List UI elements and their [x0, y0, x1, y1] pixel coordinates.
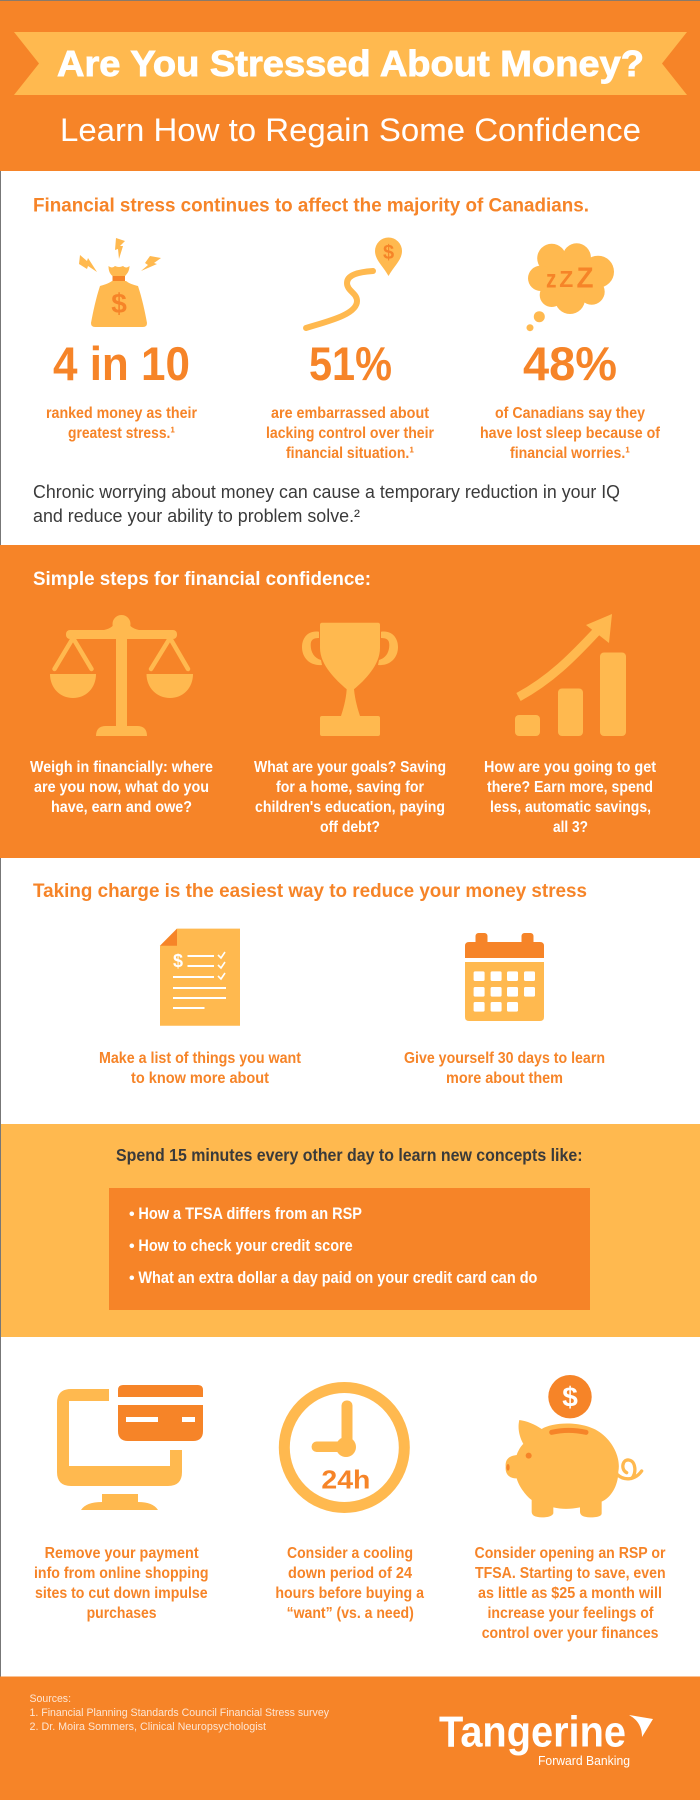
heading: simple steps: Simple steps for financial confidence: — [33, 569, 371, 590]
stat caption: lost sleep — [480, 405, 661, 462]
stat caption: ranked money: greatest stress.¹ — [68, 425, 175, 442]
stat caption: embarrassed: financial situation.¹ — [286, 445, 414, 462]
icon: winding road with location pin — [306, 238, 402, 328]
heading: taking charge: Taking charge is the easiest way to reduce your money stress — [33, 881, 587, 902]
concept list box: • — [129, 1206, 135, 1223]
subtitle: Learn How to Regain Some Confidence — [60, 112, 641, 148]
heading: spend 15 minutes: Spend 15 minutes every other day to learn new concepts like: — [116, 1145, 582, 1165]
step text: goals: for a home, saving for — [276, 779, 424, 796]
step text: weigh in: Weigh in financially: where — [30, 759, 213, 776]
step text: weigh in: are you now, what do you — [34, 779, 209, 796]
tip text: payment info — [34, 1545, 208, 1622]
tip text: cooling down — [275, 1545, 424, 1622]
stat caption: embarrassed: are embarrassed about — [271, 405, 430, 422]
step text: goals: What are your goals? Saving — [254, 759, 446, 776]
panel: simple steps — [0, 545, 700, 858]
icon: money bag with lightning bolts: $ — [111, 288, 127, 319]
caption: make a list — [99, 1050, 302, 1087]
stat: 48%: 48% — [523, 337, 617, 390]
icon: thought cloud with zzz: Z — [559, 266, 573, 292]
step text: how to get there: there? Earn more, spend — [487, 779, 653, 796]
text block: chronic worrying: Chronic worrying about money can cause a temporary reduction in your IQ — [33, 482, 620, 502]
icon: checklist document — [160, 929, 240, 1026]
text block: chronic worrying — [33, 482, 620, 526]
sources: 2. Dr. Moira Sommers, Clinical Neuropsychologist — [30, 1721, 266, 1733]
title ribbon banner — [14, 32, 687, 95]
concept list box: What an extra dollar a day paid on your credit card can do — [138, 1269, 537, 1287]
panel: footer — [0, 1676, 700, 1800]
icon: thought cloud with zzz: Z — [576, 263, 594, 295]
tip text: payment info: Remove your payment — [45, 1545, 199, 1562]
tip text: cooling down: hours before buying a — [275, 1585, 424, 1602]
concept list box: How to check your credit score — [138, 1237, 353, 1255]
caption: 30 days: more about them — [446, 1070, 563, 1087]
step text: goals: children's education, paying — [255, 799, 445, 816]
header panel — [0, 0, 700, 171]
tip text: cooling down: “want” (vs. a need) — [287, 1605, 414, 1622]
icon: 24 hour clock: 24h — [321, 1464, 370, 1494]
sources: 1. Financial Planning Standards Council Financial Stress survey — [30, 1707, 329, 1719]
step text: goals — [254, 759, 446, 836]
stat caption: ranked money — [46, 405, 197, 442]
text block: chronic worrying: and reduce your ability to problem solve.² — [33, 506, 360, 526]
concept list box: • — [129, 1270, 135, 1287]
panel: practical tips — [34, 1375, 666, 1642]
stat caption: ranked money: ranked money as their — [46, 405, 197, 422]
icon: winding road with location pin: $ — [383, 242, 394, 264]
step text: how to get there: How are you going to get — [484, 759, 657, 776]
stat caption: lost sleep: financial worries.¹ — [510, 445, 630, 462]
panel: taking charge — [33, 881, 605, 1087]
sources — [30, 1693, 329, 1733]
icon: piggy bank with coin — [506, 1375, 642, 1517]
tip text: open an RSP or TFSA: as little as $25 a month will — [478, 1585, 662, 1602]
caption: make a list: to know more about — [131, 1070, 270, 1087]
tip text: open an RSP or TFSA: Consider opening an RSP or — [474, 1545, 666, 1562]
stat caption: lost sleep: of Canadians say they — [495, 405, 645, 422]
stat: 4 in 10: 4 in 10 — [53, 337, 190, 390]
tip text: open an RSP or TFSA: increase your feelings of — [488, 1605, 654, 1622]
step text: goals: off debt? — [320, 819, 380, 836]
step text: weigh in: have, earn and owe? — [51, 799, 192, 816]
step text: how to get there: all 3? — [553, 819, 588, 836]
icon: trophy — [302, 623, 398, 736]
heading: financial stress: Financial stress continues to affect the majority of Canadians. — [33, 196, 589, 216]
concept list box: How a TFSA differs from an RSP — [138, 1205, 362, 1223]
icon: 24 hour clock — [284, 1388, 404, 1508]
stat caption: embarrassed: lacking control over their — [266, 425, 434, 442]
logo: Tangerine: Forward Banking — [538, 1753, 630, 1768]
icon: rising bar chart with arrow — [515, 614, 626, 736]
tip text: payment info: sites to cut down impulse — [35, 1585, 208, 1602]
tip text: cooling down: down period of 24 — [288, 1565, 412, 1582]
icon: checklist document: $ — [173, 951, 183, 971]
stat: 51%: 51% — [309, 337, 392, 390]
stat caption: lost sleep: have lost sleep because of — [480, 425, 661, 442]
icon: thought cloud with zzz — [526, 243, 614, 331]
icon: monitor with credit card — [57, 1385, 203, 1510]
title: Are You Stressed About Money? — [57, 43, 644, 84]
step text: how to get there — [484, 759, 657, 836]
tip text: open an RSP or TFSA — [474, 1545, 666, 1642]
tip text: open an RSP or TFSA: control over your finances — [482, 1625, 659, 1642]
logo: Tangerine: Tangerine — [439, 1708, 626, 1757]
panel: financial stress statistics — [33, 196, 661, 526]
concept list box: • — [129, 1238, 135, 1255]
caption: 30 days: Give yourself 30 days to learn — [404, 1050, 605, 1067]
tip text: cooling down: Consider a cooling — [287, 1545, 413, 1562]
concept list box — [109, 1188, 590, 1310]
panel: spend 15 minutes — [1, 1124, 700, 1337]
caption: 30 days — [404, 1050, 605, 1087]
caption: make a list: Make a list of things you want — [99, 1050, 302, 1067]
step text: how to get there: less, automatic savings, — [490, 799, 651, 816]
stat caption: embarrassed — [266, 405, 434, 462]
icon: calendar — [465, 933, 544, 1021]
sources: Sources: — [30, 1693, 71, 1705]
icon: piggy bank with coin: $ — [562, 1382, 578, 1412]
icon: money bag with lightning bolts — [79, 238, 161, 327]
icon: thought cloud with zzz: z — [546, 264, 556, 294]
tip text: payment info: info from online shopping — [34, 1565, 208, 1582]
tip text: payment info: purchases — [87, 1605, 157, 1622]
tip text: open an RSP or TFSA: TFSA. Starting to save, even — [475, 1565, 666, 1582]
step text: weigh in — [30, 759, 213, 816]
icon: balance scale — [50, 615, 193, 736]
